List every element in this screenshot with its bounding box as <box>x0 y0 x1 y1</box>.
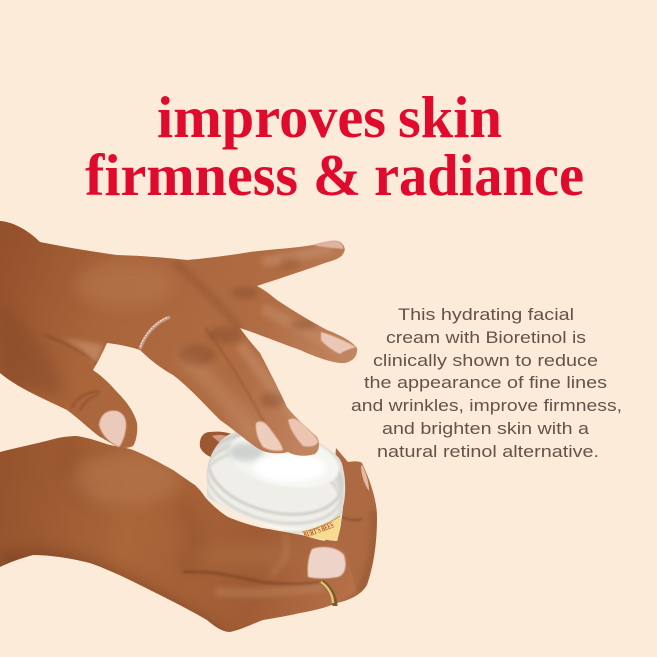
description text: clinically shown to reduce <box>373 351 598 370</box>
jar body <box>207 432 346 541</box>
infographic canvas <box>0 96 620 632</box>
description text: This hydrating facial <box>398 305 574 324</box>
gold ring <box>322 582 335 606</box>
title: radiance <box>374 142 584 208</box>
cream jar <box>206 432 346 541</box>
lower hand: fingers behind jar <box>200 432 377 603</box>
cream surface <box>230 436 340 486</box>
title <box>85 84 584 208</box>
description text <box>351 305 622 461</box>
title: firmness <box>85 142 298 208</box>
description text: natural retinol alternative. <box>377 442 599 461</box>
upper hand <box>0 215 365 460</box>
title: improves <box>157 84 386 150</box>
cream jar: BURT'S BEES <box>302 520 335 540</box>
silver ring <box>140 317 170 349</box>
fingernails <box>99 241 356 451</box>
thumb nail <box>308 547 346 578</box>
title: skin <box>398 84 502 150</box>
description text: the appearance of fine lines <box>364 373 607 392</box>
lower hand: palm and thumb <box>0 436 356 632</box>
description text: and brighten skin with a <box>382 419 590 438</box>
description text: cream with Bioretinol is <box>386 328 586 347</box>
title: & <box>313 142 361 208</box>
description text: and wrinkles, improve firmness, <box>351 396 622 415</box>
product label <box>302 517 341 541</box>
